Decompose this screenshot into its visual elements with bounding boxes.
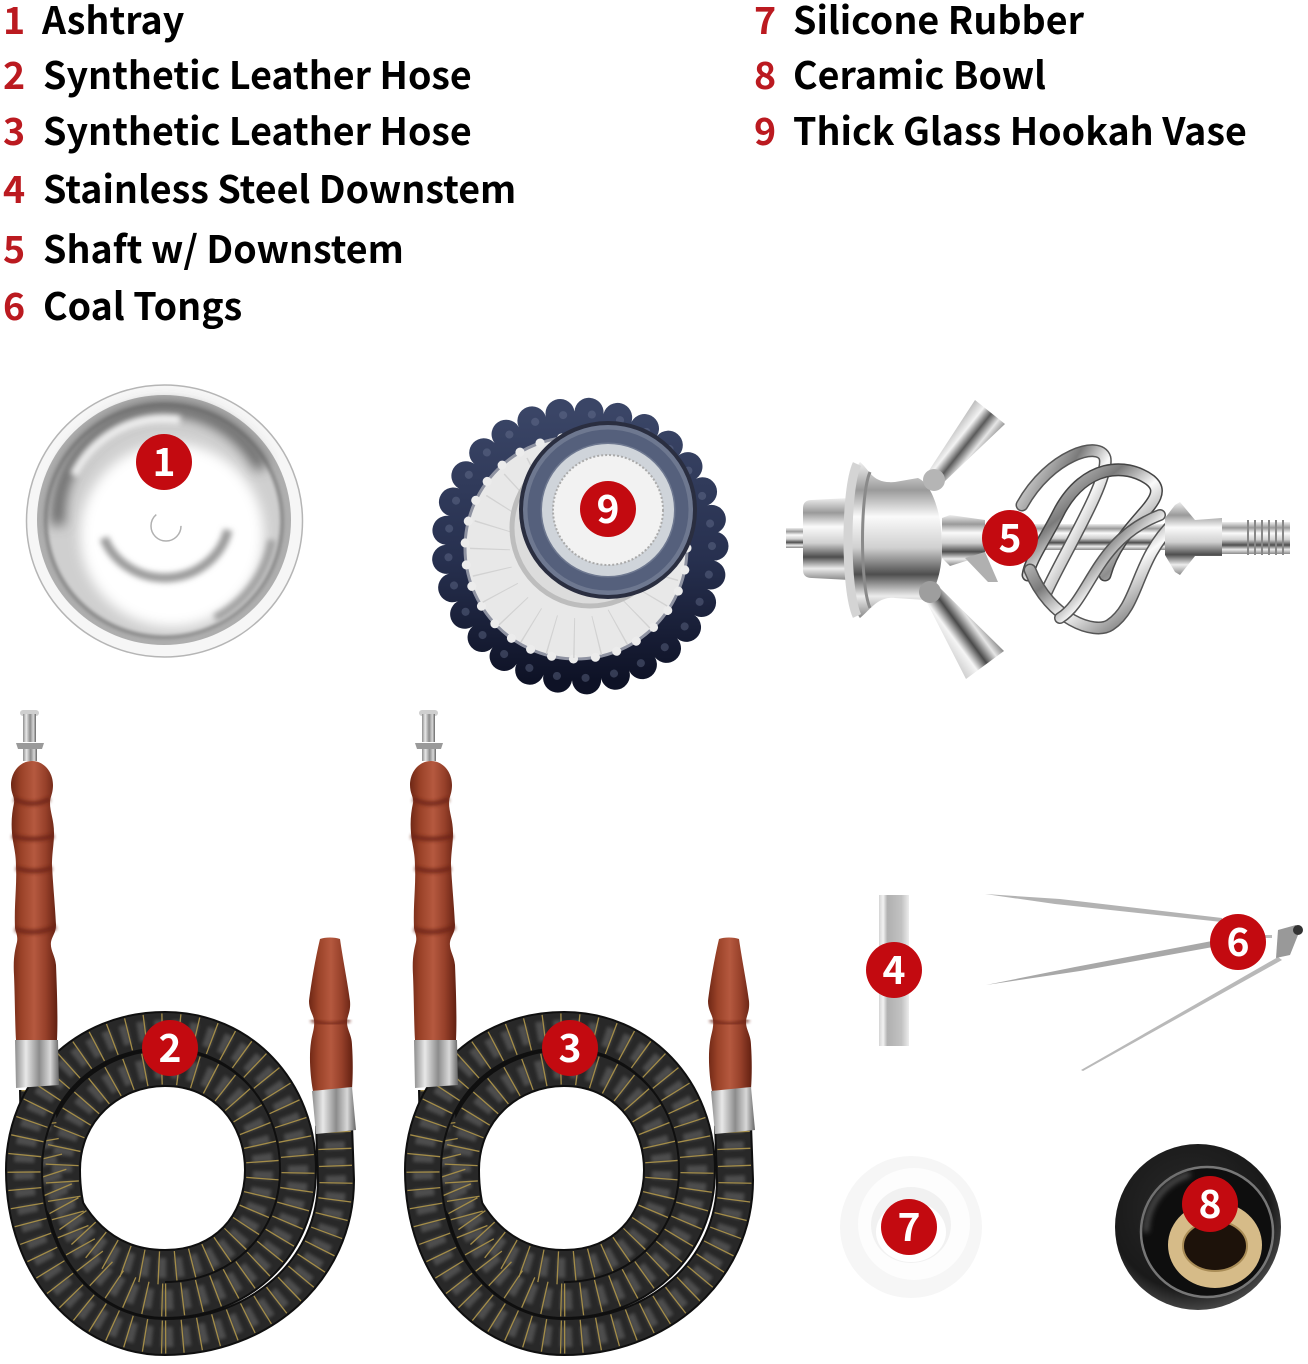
legend item 6: 6 [3,276,25,331]
icon: silicone rubber [840,1156,982,1298]
marker 2: 2 [158,1018,182,1074]
legend item 4: 4 [3,159,25,214]
legend item 9: 9 [754,101,776,156]
marker 5: 5 [998,508,1022,564]
marker 8: 8 [1198,1174,1222,1230]
legend item 6: Coal Tongs [43,276,242,331]
parts list, right column [754,0,1247,156]
marker 9 [580,479,636,537]
icon: coal tongs [985,894,1303,1071]
legend item 2: 2 [3,45,25,100]
marker 3 [542,1018,598,1076]
icon: glass hookah vase [446,412,714,680]
marker 7: 7 [897,1197,921,1253]
legend item 3: 3 [3,101,25,156]
marker 9: 9 [596,479,620,535]
parts list, left column [3,0,516,331]
marker 1: 1 [152,432,176,488]
legend item 4: Stainless Steel Downstem [43,159,516,214]
icon: stainless steel downstem [879,895,909,1046]
marker 6 [1210,912,1266,970]
legend item 5: Shaft w/ Downstem [43,219,404,274]
icon: shaft with downstem [786,400,1290,679]
icon: ceramic bowl [1115,1144,1281,1310]
marker 8 [1182,1174,1238,1232]
marker 4 [866,940,922,998]
icon: hose 2 [11,710,356,1337]
marker 7 [881,1197,937,1255]
icon: ashtray [26,385,302,657]
icon: hose 3 [410,710,755,1337]
marker 2 [142,1018,198,1076]
legend item 5: 5 [3,219,25,274]
legend item 8: 8 [754,45,776,100]
marker 4: 4 [882,940,906,996]
marker 3: 3 [558,1018,582,1074]
marker 5 [982,508,1038,566]
legend item 8: Ceramic Bowl [793,45,1046,100]
marker 6: 6 [1226,912,1250,968]
marker 1 [136,432,192,490]
legend item 9: Thick Glass Hookah Vase [793,101,1247,156]
legend item 2: Synthetic Leather Hose [43,45,472,100]
legend item 3: Synthetic Leather Hose [43,101,472,156]
